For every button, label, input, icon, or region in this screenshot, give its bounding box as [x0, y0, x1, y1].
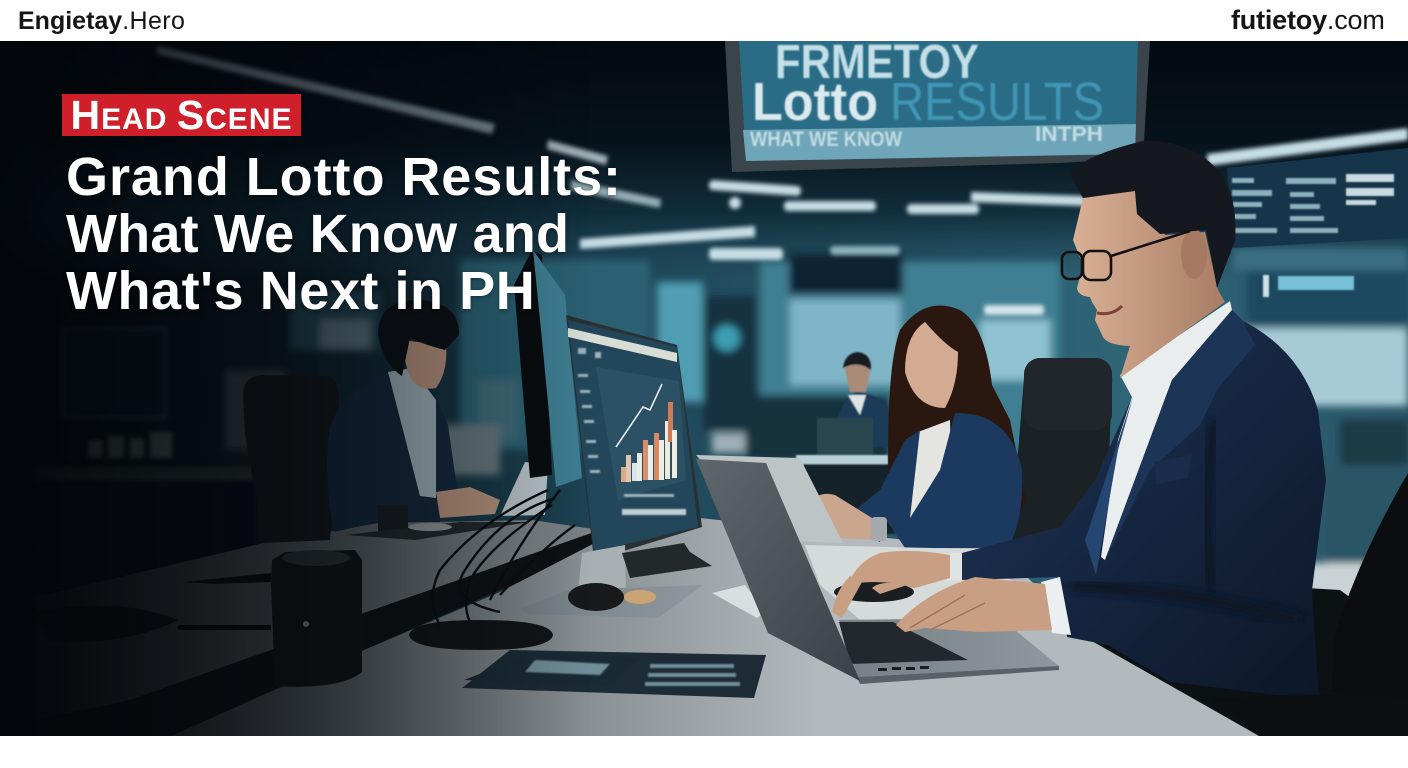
brand left: Engietay.Hero [18, 7, 185, 35]
overhead screen: Lotto [752, 72, 878, 132]
main title: What We Know and [66, 204, 569, 264]
brand right: futietoy.com [1231, 5, 1385, 35]
bottom white strip [0, 736, 1408, 768]
monitor bar chart [616, 384, 677, 482]
lapels [1105, 310, 1255, 560]
overhead screen [725, 36, 1150, 172]
main man: hands and mouse [832, 551, 1052, 632]
header bar [0, 0, 1408, 41]
main title [66, 147, 622, 321]
folder on desk [462, 650, 766, 698]
secondary tablet [696, 455, 843, 543]
main title: Grand Lotto Results: [66, 147, 622, 207]
overhead screen: RESULTS [890, 72, 1104, 132]
dark canister [32, 550, 362, 687]
main monitor [566, 315, 702, 560]
secondary monitor side [514, 250, 582, 487]
overhead screen: INTPH [1035, 123, 1103, 146]
smile [1097, 306, 1122, 314]
main man: jacket [940, 301, 1326, 700]
cables [432, 490, 575, 625]
left person at desk [243, 300, 548, 543]
man's chair [1011, 358, 1112, 545]
cuffs [1041, 577, 1071, 635]
main title: What's Next in PH [66, 261, 535, 321]
far background worker [796, 352, 895, 534]
main man: head [1062, 141, 1235, 378]
right wall screen [1227, 148, 1408, 297]
main laptop [696, 459, 1059, 684]
shirt and collar [1101, 301, 1232, 560]
papers [712, 545, 1100, 625]
glasses [1062, 231, 1190, 280]
overhead screen: WHAT WE KNOW [750, 128, 902, 151]
monitor stand [409, 543, 712, 650]
desk [36, 518, 1408, 736]
right chair [1212, 473, 1408, 736]
ceiling lights [157, 46, 1408, 315]
central woman [808, 306, 1112, 548]
left shelf and monitor [36, 328, 256, 590]
office chair [243, 375, 339, 543]
category tag: HEAD SCENE [70, 92, 292, 138]
